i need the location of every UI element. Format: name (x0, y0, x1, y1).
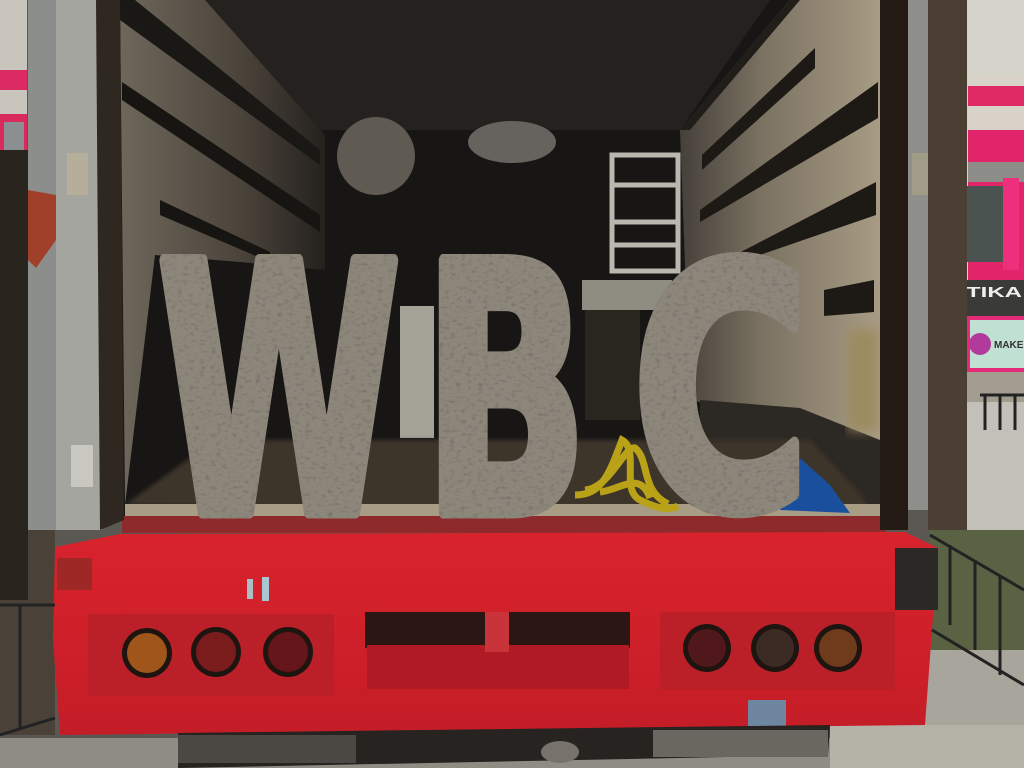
letter W: W (157, 193, 401, 594)
icon: round wall fan (337, 117, 415, 195)
truck bed edge (122, 516, 886, 533)
stored items: fan, lamp, white shelf (337, 117, 678, 438)
right cargo wall with dark stripes (680, 0, 882, 510)
iron fence at left (0, 605, 55, 735)
icon: lamp fixture (468, 121, 556, 163)
under-truck shadow (178, 725, 830, 768)
right truck door (880, 0, 967, 530)
yellow rope (575, 440, 678, 508)
red bumper frame (53, 532, 938, 735)
iron fence at right (930, 395, 1024, 685)
right tail lights (683, 624, 862, 672)
white shelf (612, 155, 678, 271)
letter C: C (632, 197, 810, 587)
letter B: B (423, 193, 588, 594)
left tail lights (122, 627, 313, 678)
blue tarp (780, 458, 850, 513)
building facade: pink storefront with TIKA sign (965, 0, 1024, 402)
floor of cargo area (125, 440, 880, 516)
left truck door (0, 0, 124, 600)
cargo interior (120, 0, 900, 520)
sign: stone letters WBC (157, 193, 810, 594)
building facade: pink storefront with TIKA sign: TIKA (966, 284, 1022, 301)
left cargo wall with dark stripes (120, 0, 325, 505)
